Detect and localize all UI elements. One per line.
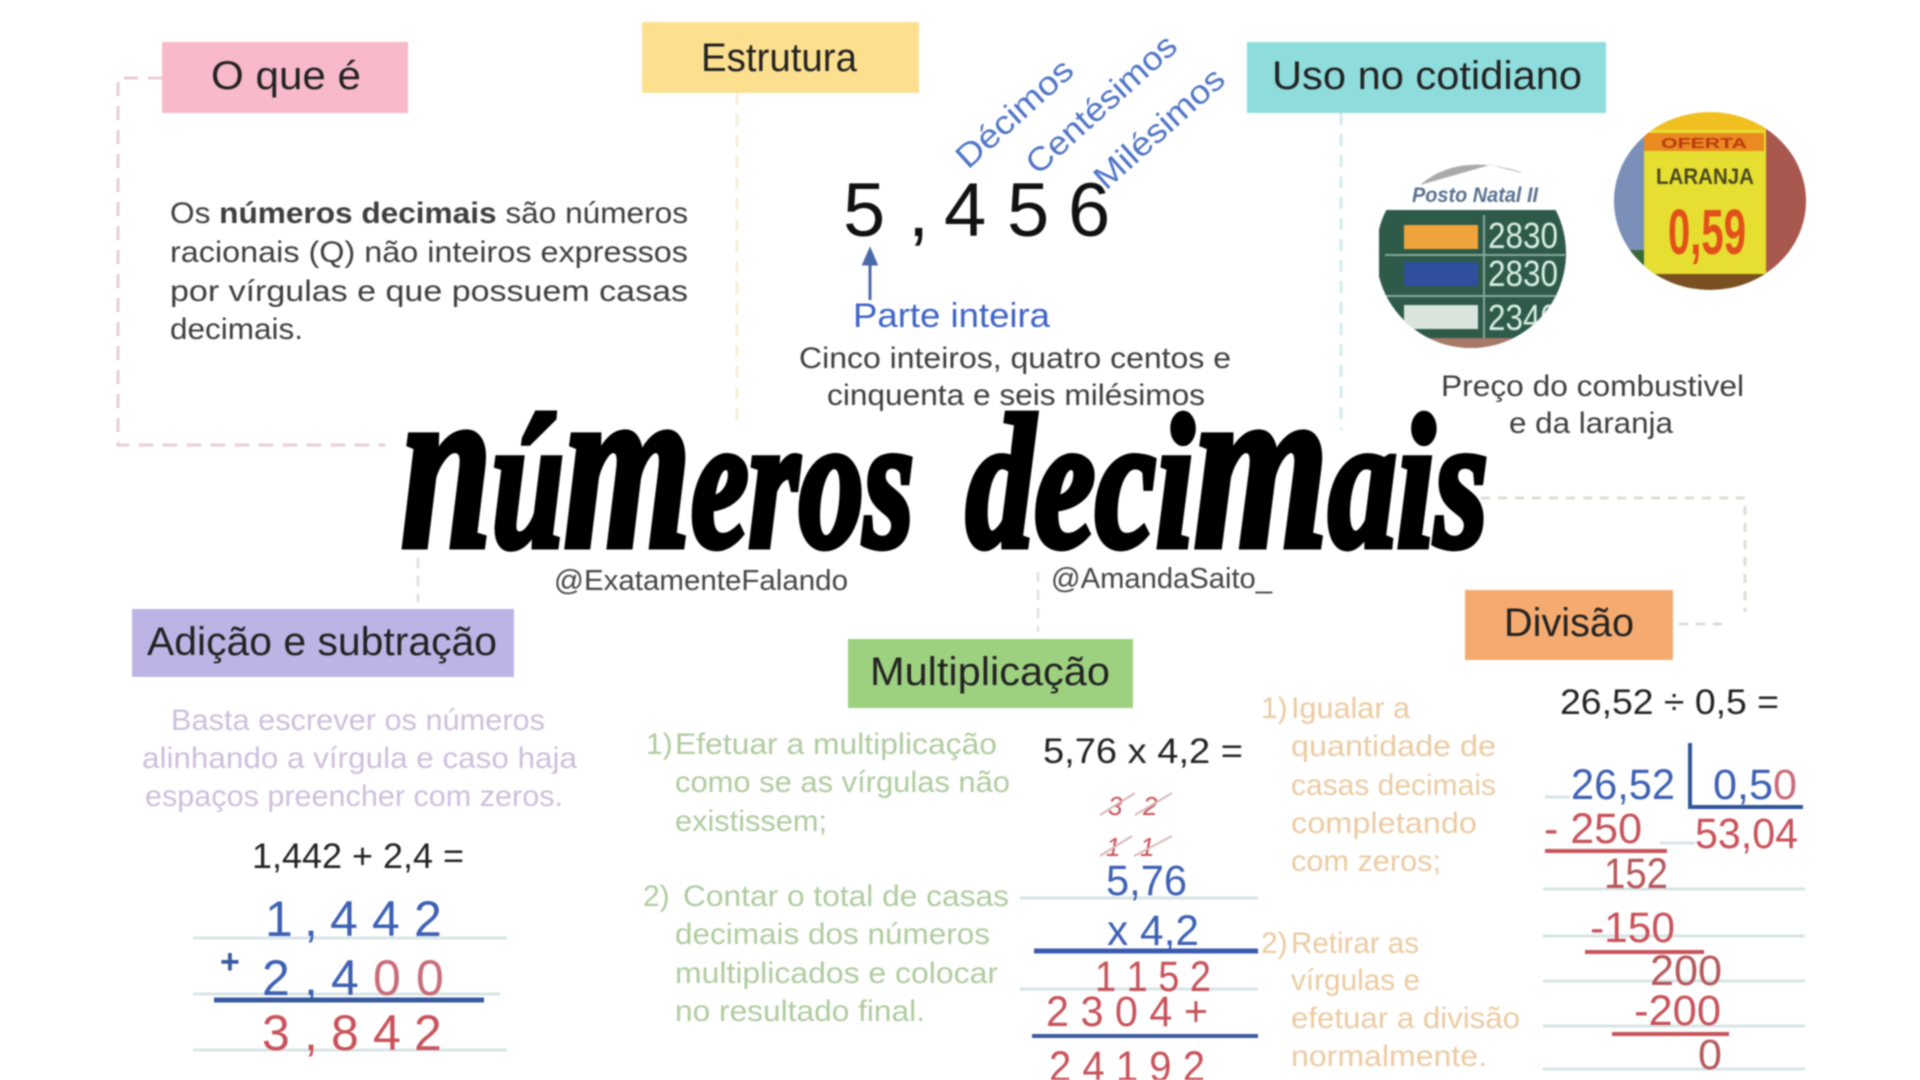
text block: definition: decimais. (170, 313, 303, 346)
rotated label: Centésimos: Centésimos (1018, 27, 1184, 181)
text: division steps: completando (1291, 807, 1477, 840)
text: addition rule: Basta escrever os números (171, 704, 545, 737)
title (401, 332, 1488, 598)
photo: orange price sign (1613, 111, 1807, 291)
worked example: division: -200 (1634, 987, 1721, 1035)
panel: division (1261, 683, 1805, 1079)
text: division steps: com zeros; (1291, 845, 1441, 878)
worked example: division: 53,04 (1695, 810, 1798, 858)
worked example: multiplication: 1 1 5 2 (1095, 953, 1211, 1001)
worked example: multiplication: 5,76 (1106, 857, 1187, 905)
equation: division: 26,52 ÷ 0,5 = (1560, 683, 1779, 722)
heading: Divisão (1465, 590, 1673, 660)
worked example: division: 0,5 (1713, 761, 1773, 809)
chart: number structure 5,456: 5,456 (843, 168, 1110, 253)
text: addition rule (142, 704, 577, 813)
worked example: multiplication: x 4,2 (1107, 907, 1199, 955)
photo: fuel price board: 2830 (1488, 215, 1558, 256)
heading: Estrutura (642, 22, 919, 93)
text: addition rule: alinhando a vírgula e caso haja (142, 742, 577, 775)
connector: Multiplicação (1036, 572, 1040, 632)
text: division steps: Retirar as (1291, 927, 1419, 960)
title: números (401, 332, 914, 598)
arrow: integer part (864, 250, 876, 300)
worked example: addition: 00 (373, 950, 444, 1006)
text: multiplication steps: 2) (643, 880, 670, 913)
handle: ExatamenteFalando: @ExatamenteFalando (554, 565, 848, 597)
worked example: multiplication: 11 (1106, 832, 1154, 862)
caption: photos: Preço do combustivel (1441, 370, 1744, 403)
heading: Multiplicação (848, 639, 1133, 708)
rotated label: Milésimos: Milésimos (1086, 60, 1232, 196)
heading: Adição e subtração (132, 609, 514, 677)
caption: photos: e da laranja (1509, 407, 1673, 440)
worked example: division: - 250 (1544, 805, 1642, 853)
photo: fuel price board: 2340 (1488, 297, 1558, 338)
text: reading of the number: Cinco inteiros, quatro centos e (799, 342, 1231, 375)
worked example: multiplication: 2 3 0 4 + (1046, 988, 1208, 1036)
text block: definition: racionais (Q) não inteiros expressos (170, 236, 688, 269)
panel: multiplication (643, 728, 1258, 1080)
worked example: addition (193, 891, 507, 1061)
worked example: addition: 3,842 (262, 1005, 442, 1061)
rotated label: Décimos: Décimos (948, 51, 1080, 175)
photo: fuel price board: Posto Natal II (1412, 184, 1539, 207)
text: reading of the number (799, 342, 1231, 412)
text: division steps: Igualar a (1291, 692, 1410, 725)
photo: orange price sign: LARANJA (1656, 164, 1754, 189)
worked example: division (1543, 743, 1805, 1079)
caption: photos (1441, 370, 1744, 440)
label: Parte inteira: Parte inteira (853, 297, 1050, 335)
heading: Divisão: Divisão (1504, 601, 1634, 645)
worked example: addition: + (220, 943, 240, 981)
text: division steps: 2) (1261, 927, 1288, 960)
worked example: division: 0 (1698, 1031, 1722, 1079)
worked example: multiplication (1020, 791, 1258, 1080)
title: decimais (966, 332, 1488, 598)
photo: fuel price board (1378, 164, 1567, 349)
photo: orange price sign: OFERTA (1661, 135, 1747, 152)
heading: Adição e subtração: Adição e subtração (147, 620, 497, 664)
text: multiplication steps: Efetuar a multiplicação (675, 728, 997, 761)
text: division steps: normalmente. (1291, 1040, 1487, 1073)
connector: Estrutura (736, 93, 738, 425)
worked example: addition: 1,442 (265, 891, 442, 947)
photo: orange price sign: 0,59 (1668, 196, 1746, 268)
connector: Divisão (1464, 498, 1745, 624)
text: division steps (1261, 692, 1520, 1073)
worked example: addition: 2,4 (262, 950, 359, 1006)
worked example: division: 200 (1650, 947, 1722, 995)
heading: O que é: O que é (211, 54, 361, 98)
text: multiplication steps (643, 728, 1010, 1028)
text: division steps: vírgulas e (1291, 964, 1420, 997)
text block: definition: por vírgulas e que possuem casas (170, 275, 688, 308)
text: multiplication steps: decimais dos números (675, 918, 990, 951)
worked example: division: -150 (1590, 904, 1675, 952)
heading: Multiplicação: Multiplicação (870, 650, 1110, 694)
text: multiplication steps: existissem; (675, 805, 827, 838)
text: division steps: quantidade de (1291, 730, 1496, 763)
text: multiplication steps: 1) (646, 728, 673, 761)
panel: addition and subtraction (142, 704, 577, 1061)
text: multiplication steps: multiplicados e colocar (675, 957, 998, 990)
text block: definition (170, 197, 688, 346)
equation: addition: 1,442 + 2,4 = (252, 837, 464, 876)
text: multiplication steps: como se as vírgulas não (675, 766, 1010, 799)
text: division steps: casas decimais (1291, 769, 1496, 802)
connector: Adição e subtração (416, 540, 420, 602)
text: reading of the number: cinquenta e seis milésimos (827, 379, 1205, 412)
text: multiplication steps: no resultado final. (675, 995, 925, 1028)
worked example: multiplication: 32 (1108, 791, 1158, 821)
heading: O que é (162, 42, 408, 113)
text block: definition: Os números decimais são números (170, 197, 688, 230)
text: division steps: 1) (1261, 692, 1288, 725)
chart: number structure 5,456 (799, 27, 1232, 412)
heading: Uso no cotidiano: Uso no cotidiano (1272, 54, 1582, 98)
text: addition rule: espaços preencher com zeros. (145, 780, 563, 813)
text: multiplication steps: Contar o total de casas (683, 880, 1009, 913)
heading: Uso no cotidiano (1247, 42, 1606, 113)
worked example: division: 26,52 (1571, 761, 1675, 809)
photo: fuel price board: 2830 (1488, 253, 1558, 294)
text: division steps: efetuar a divisão (1291, 1002, 1520, 1035)
worked example: division: 0 (1773, 761, 1797, 809)
handle: AmandaSaito: @AmandaSaito_ (1051, 563, 1273, 595)
connector: O que é (118, 78, 385, 445)
connector: Uso no cotidiano (1340, 113, 1342, 430)
equation: multiplication: 5,76 x 4,2 = (1043, 732, 1243, 771)
worked example: division: 152 (1604, 850, 1668, 898)
heading: Estrutura: Estrutura (701, 36, 858, 80)
